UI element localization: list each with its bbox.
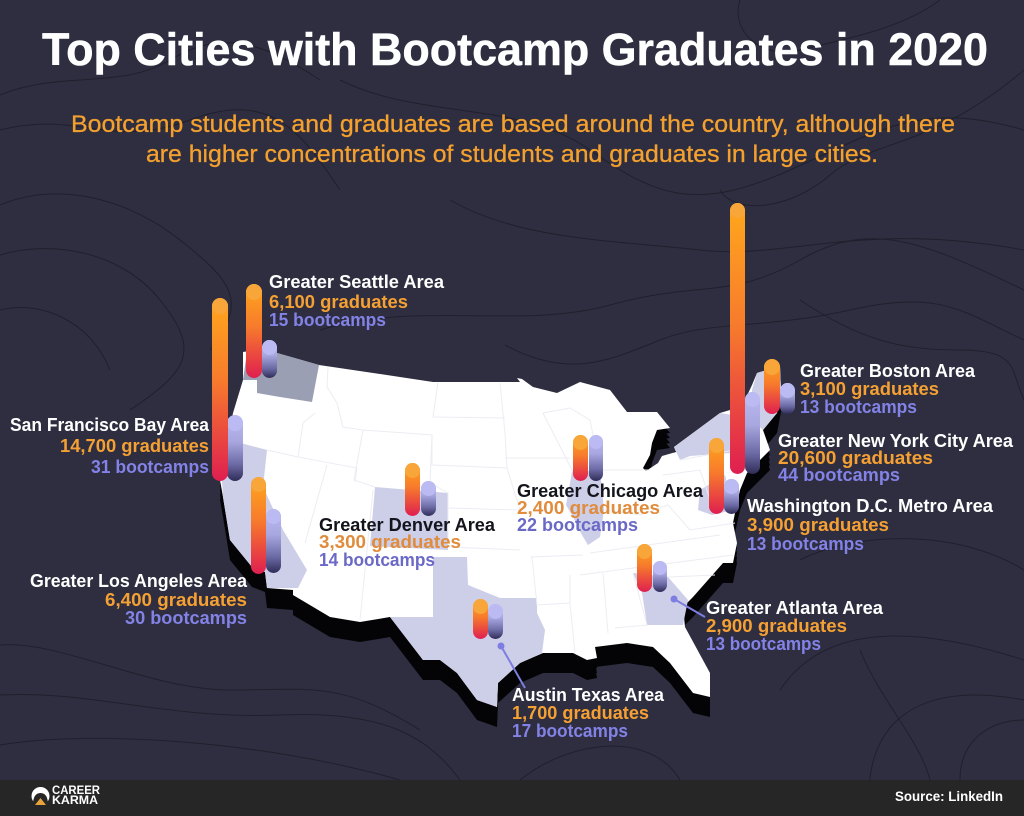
bars: Denver (405, 463, 436, 516)
bars: Boston (764, 359, 795, 414)
state: Illinois (566, 470, 604, 545)
label: Atlanta: 13 bootcamps (706, 634, 821, 654)
label: Seattle (269, 272, 445, 330)
label: Chicago: Greater Chicago Area (517, 481, 704, 501)
bars: San Francisco (212, 298, 243, 481)
label: Los Angeles: 30 bootcamps (125, 608, 247, 628)
state: Washington (243, 349, 319, 402)
map of the United States (220, 349, 781, 727)
label: New York: 44 bootcamps (778, 465, 900, 485)
label: San Francisco: 14,700 graduates (60, 436, 209, 456)
label: San Francisco: 31 bootcamps (91, 457, 209, 477)
label: Austin: 1,700 graduates (512, 703, 649, 723)
label: Denver: 3,300 graduates (319, 532, 461, 552)
bars: New York (730, 203, 760, 474)
label: New York: Greater New York City Area (778, 431, 1014, 451)
intro text (71, 111, 955, 168)
label: Denver (319, 515, 496, 570)
label: Denver: 14 bootcamps (319, 550, 435, 570)
label: Boston: 3,100 graduates (800, 379, 939, 399)
state: Colorado (370, 487, 448, 550)
bars: Washington D.C. (709, 438, 739, 514)
label: Washington D.C.: 3,900 graduates (747, 515, 889, 535)
state: Georgia (633, 573, 688, 625)
source credit: Source: LinkedIn (895, 789, 1003, 804)
map land (220, 349, 781, 707)
bars: Seattle (246, 284, 277, 378)
state: California (222, 441, 307, 588)
label: Washington D.C. (747, 496, 994, 554)
map extrusion shadow (220, 354, 781, 727)
state: Virginia area (698, 475, 733, 515)
intro text: Bootcamp students and graduates are based around the country, although there (71, 111, 955, 138)
label: Seattle: Greater Seattle Area (269, 272, 445, 292)
label: Atlanta: Greater Atlanta Area (706, 598, 884, 618)
label: Chicago: 2,400 graduates (517, 498, 660, 518)
label: Denver: Greater Denver Area (319, 515, 496, 535)
title: Top Cities with Bootcamp Graduates in 2020 (42, 24, 988, 75)
label: Washington D.C.: 13 bootcamps (747, 534, 864, 554)
bars: Austin (473, 599, 503, 639)
label: Chicago (517, 481, 704, 535)
state: Texas (390, 557, 545, 707)
label: Chicago: 22 bootcamps (517, 515, 638, 535)
bars: Los Angeles (251, 477, 281, 574)
label: Austin (512, 685, 665, 741)
label: Atlanta: 2,900 graduates (706, 616, 847, 636)
logo: Career Karma (32, 783, 100, 807)
label: Los Angeles (30, 571, 248, 628)
logo: Career Karma: KARMA (52, 793, 98, 807)
leader line: Atlanta (670, 596, 705, 617)
label: New York (778, 431, 1014, 485)
intro text: are higher concentrations of students and graduates in large cities. (146, 141, 878, 168)
logo: Career Karma: CAREER (52, 783, 100, 797)
label: Washington D.C.: Washington D.C. Metro Area (747, 496, 994, 516)
label: Boston: Greater Boston Area (800, 361, 976, 381)
bars: Chicago (573, 435, 603, 481)
label: Los Angeles: 6,400 graduates (105, 590, 247, 610)
label: Seattle: 6,100 graduates (269, 292, 408, 312)
state: Massachusetts (752, 366, 781, 430)
footer bar (0, 780, 1024, 816)
label: San Francisco (10, 415, 210, 477)
label: Austin: 17 bootcamps (512, 721, 628, 741)
label: Los Angeles: Greater Los Angeles Area (30, 571, 248, 591)
label: New York: 20,600 graduates (778, 448, 933, 468)
label: San Francisco: San Francisco Bay Area (10, 415, 210, 435)
logo icon (32, 787, 50, 805)
bars: Atlanta (637, 544, 667, 592)
leader line: Austin (498, 642, 525, 688)
label: Seattle: 15 bootcamps (269, 310, 386, 330)
state: New York (674, 413, 752, 460)
label: Atlanta (706, 598, 884, 654)
state borders (267, 367, 735, 653)
label: Boston (800, 361, 976, 417)
label: Boston: 13 bootcamps (800, 397, 917, 417)
label: Austin: Austin Texas Area (512, 685, 665, 705)
